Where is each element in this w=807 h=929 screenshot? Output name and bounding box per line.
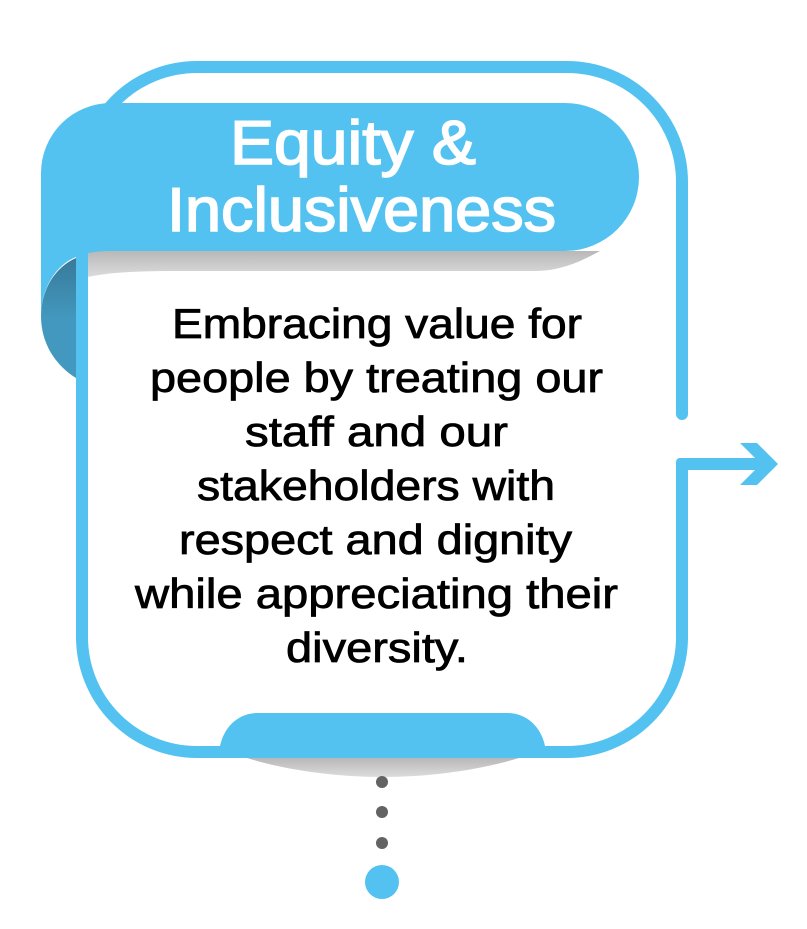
heading xyxy=(167,109,556,245)
body text: diversity. xyxy=(286,624,468,671)
body text: people by treating our xyxy=(150,354,603,401)
dotted connector xyxy=(376,776,388,849)
heading: Equity & xyxy=(230,109,476,178)
end node circle xyxy=(365,865,399,899)
body text: stakeholders with xyxy=(197,462,555,509)
bottom tab xyxy=(220,713,545,758)
bottom tab shadow xyxy=(247,758,519,777)
ribbon shadow xyxy=(88,251,600,277)
arrow xyxy=(676,443,778,485)
ribbon fold: dark underside xyxy=(41,258,76,378)
heading ribbon xyxy=(41,103,639,316)
body text xyxy=(134,300,618,671)
body text: staff and our xyxy=(245,408,508,455)
frame segment over fold xyxy=(76,250,88,390)
frame: rounded outline with right-side gap xyxy=(82,67,682,752)
body text: respect and dignity xyxy=(179,516,572,563)
heading: Inclusiveness xyxy=(167,176,556,245)
body text: while appreciating their xyxy=(134,570,618,617)
body text: Embracing value for xyxy=(172,300,582,347)
